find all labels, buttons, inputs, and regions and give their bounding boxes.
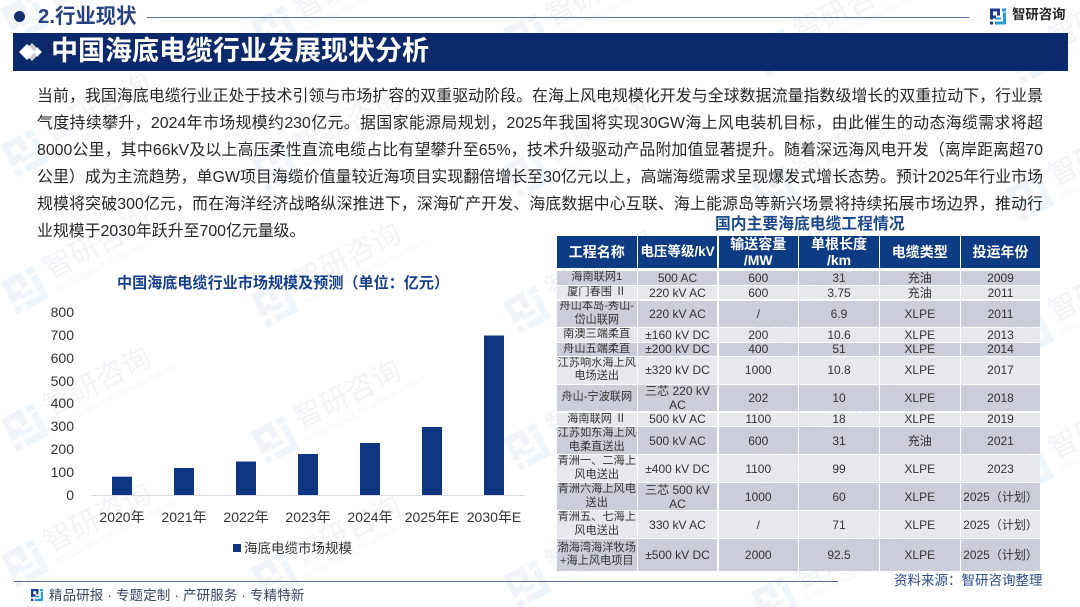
row: / <box>757 518 760 532</box>
row: 330 kV AC <box>649 518 706 532</box>
text: INTELLIGENCE RESEARCH GROUP <box>53 361 178 431</box>
y axis labels: 0 <box>66 487 74 503</box>
text: INTELLIGENCE RESEARCH GROUP <box>303 237 428 307</box>
row <box>557 483 1040 510</box>
y axis labels: 800 <box>51 304 74 320</box>
intro paragraph <box>37 87 1043 240</box>
text: INTELLIGENCE RESEARCH GROUP <box>803 124 928 194</box>
row <box>557 286 1040 299</box>
row: XLPE <box>904 548 935 562</box>
x axis labels: 2023年 <box>285 509 331 525</box>
text: 智研咨询 <box>38 341 157 423</box>
icon: brand logo <box>990 8 1006 24</box>
row: 500 AC <box>658 271 697 285</box>
row: 送出 <box>586 497 608 509</box>
text: 智研咨询 <box>788 377 907 459</box>
row: 2023 <box>987 462 1014 476</box>
row: 2009 <box>987 271 1014 285</box>
row: 青洲六海上风电 <box>558 483 636 495</box>
row <box>557 271 1040 285</box>
row: 600 <box>748 271 768 285</box>
row <box>557 539 1040 571</box>
row: XLPE <box>904 490 935 504</box>
row <box>557 427 1040 454</box>
row: XLPE <box>904 363 935 377</box>
footer slogan: 精品研报 · 专题定制 · 产研服务 · 专精特新 <box>49 588 304 603</box>
row: 92.5 <box>827 548 851 562</box>
y axis labels: 200 <box>51 441 74 457</box>
text: 智研咨询 <box>788 514 907 596</box>
row <box>557 455 1040 482</box>
text: 智研咨询 <box>288 490 407 572</box>
header rule <box>147 17 969 18</box>
row: 10.8 <box>827 363 851 377</box>
bars <box>112 336 504 495</box>
icon: footer logo <box>31 589 43 601</box>
title banner <box>13 33 1068 71</box>
row: 71 <box>832 518 846 532</box>
chart title: 中国海底电缆行业市场规模及预测（单位：亿元） <box>117 275 449 292</box>
table header: 投运年份 <box>972 244 1028 260</box>
row: 电柔直送出 <box>569 441 625 453</box>
text: 智研咨询 <box>288 217 407 299</box>
text: INTELLIGENCE RESEARCH GROUP <box>53 87 178 157</box>
row: 岱山联网 <box>574 314 619 326</box>
row: +海上风电项目 <box>560 555 634 567</box>
row: 风电送出 <box>574 469 619 481</box>
text: INTELLIGENCE RESEARCH GROUP <box>555 108 680 178</box>
row: 2000 <box>745 548 772 562</box>
row: ±400 kV DC <box>645 462 710 476</box>
icon: double diamonds <box>19 43 42 61</box>
brand name: 智研咨询 <box>1012 7 1066 22</box>
table header <box>557 236 1040 268</box>
section bullet <box>14 11 25 22</box>
row: 200 <box>748 328 768 342</box>
text: 智研咨询 <box>788 104 907 186</box>
row <box>557 511 1040 538</box>
row: 31 <box>832 271 846 285</box>
intro paragraph: 规模将突破300亿元，而在海洋经济战略纵深推进下，深海矿产开发、海底数据中心互联、海上能源岛等新兴场景将持续拓展市场边界，推动行 <box>37 196 1043 213</box>
row <box>557 328 1040 342</box>
row: 充油 <box>908 271 932 285</box>
legend: 海底电缆市场规模 <box>244 540 352 556</box>
y axis labels: 700 <box>51 327 74 343</box>
y axis labels: 300 <box>51 418 74 434</box>
row: 舟山-宁波联网 <box>561 391 632 403</box>
text: 智研咨询 <box>788 240 907 322</box>
row: 2025（计划） <box>963 548 1038 562</box>
x axis labels <box>99 509 521 525</box>
text: INTELLIGENCE RESEARCH GROUP <box>803 397 928 467</box>
text: 智研咨询 <box>288 354 407 436</box>
table: major submarine cable projects <box>557 236 1040 571</box>
row: 10.6 <box>827 328 851 342</box>
row <box>557 413 1040 426</box>
row: 99 <box>832 462 846 476</box>
main title: 中国海底电缆行业发展现状分析 <box>51 36 429 66</box>
row: 600 <box>748 434 768 448</box>
row: ±500 kV DC <box>645 548 710 562</box>
row: 风电送出 <box>574 525 619 537</box>
row: 江苏响水海上风 <box>558 357 636 369</box>
table title: 国内主要海底电缆工程情况 <box>715 216 905 233</box>
intro paragraph: 当前，我国海底电缆行业正处于技术引领与市场扩容的双重驱动阶段。在海上风电规模化开发与全球数据流量指数级增长的双重拉动下，行业景 <box>37 88 1043 105</box>
row: 渤海湾海洋牧场 <box>558 542 636 554</box>
text: 智研咨询 <box>38 204 157 286</box>
y axis labels: 400 <box>51 395 74 411</box>
text: INTELLIGENCE RESEARCH GROUP <box>555 381 680 451</box>
text: 智研咨询 <box>288 81 407 163</box>
y axis labels: 500 <box>51 373 74 389</box>
intro paragraph: 公里）成为主流趋势，单GW项目海缆价值量较近海项目实现翻倍增长至30亿元以上，高端海缆需求呈现爆发式增长态势。预计2025年行业市场 <box>37 169 1043 186</box>
intro paragraph: 业规模于2030年跃升至700亿元量级。 <box>37 223 305 240</box>
row: 2017 <box>987 363 1014 377</box>
row: 海南联网1 <box>571 271 622 283</box>
table header: /km <box>827 252 851 268</box>
row: 电场送出 <box>574 370 619 382</box>
row <box>557 343 1040 356</box>
text: INTELLIGENCE RESEARCH GROUP <box>53 497 178 567</box>
row: 青洲五、七海上 <box>558 511 636 523</box>
row: ±160 kV DC <box>645 328 710 342</box>
text: 智研咨询 <box>540 498 659 580</box>
text: 智研咨询 <box>38 67 157 149</box>
row: 2018 <box>987 391 1014 405</box>
bar chart <box>50 304 525 556</box>
text: INTELLIGENCE RESEARCH GROUP <box>303 101 428 171</box>
table header: 单根长度 <box>811 236 867 252</box>
x axis labels: 2025年E <box>405 509 459 525</box>
y axis labels <box>51 304 74 503</box>
text: INTELLIGENCE RESEARCH GROUP <box>803 260 928 330</box>
row: / <box>757 307 760 321</box>
row: 厦门春围 Ⅱ <box>567 286 626 298</box>
row: 1000 <box>745 490 772 504</box>
row: 220 kV AC <box>649 307 706 321</box>
text: INTELLIGENCE RESEARCH GROUP <box>555 244 680 314</box>
row: 2011 <box>988 307 1013 321</box>
row: 10 <box>832 391 846 405</box>
row <box>557 301 1040 327</box>
y axis labels: 100 <box>51 464 74 480</box>
row <box>557 385 1040 411</box>
row: 1000 <box>745 363 772 377</box>
x axis labels: 2022年 <box>223 509 269 525</box>
row: XLPE <box>904 518 935 532</box>
text: 智研咨询 <box>38 477 157 559</box>
x axis labels: 2030年E <box>467 509 521 525</box>
row: 2021 <box>987 434 1014 448</box>
row: 1100 <box>745 462 771 476</box>
text: 智研咨询 <box>540 88 659 170</box>
row: 2025（计划） <box>963 490 1038 504</box>
row: 31 <box>832 434 846 448</box>
row <box>557 357 1040 384</box>
row: XLPE <box>904 328 935 342</box>
row: 500 kV AC <box>649 434 706 448</box>
intro paragraph: 8000公里，其中66kV及以上高压柔性直流电缆占比有望攀升至65%，技术升级驱动产品附加值显著提升。随着深远海风电开发（离岸距离超70 <box>37 142 1043 159</box>
row: 充油 <box>908 434 932 448</box>
footer rule <box>14 581 838 582</box>
text: INTELLIGENCE RESEARCH GROUP <box>555 518 680 588</box>
table header: 电缆类型 <box>892 244 948 260</box>
text: INTELLIGENCE RESEARCH GROUP <box>803 534 928 604</box>
text: 智研咨询 <box>540 224 659 306</box>
y axis labels: 600 <box>51 350 74 366</box>
row: 60 <box>832 490 846 504</box>
section heading: 2.行业现状 <box>38 6 137 28</box>
text: INTELLIGENCE RESEARCH GROUP <box>303 374 428 444</box>
text: 智研咨询 <box>540 361 659 443</box>
intro paragraph: 气度持续攀升，2024年市场规模约230亿元。据国家能源局规划，2025年我国将实现30GW海上风电装机目标，由此催生的动态海缆需求将超 <box>37 115 1043 132</box>
row: XLPE <box>904 307 935 321</box>
row: 南澳三端柔直 <box>563 328 630 340</box>
table header: 电压等级/kV <box>640 244 715 259</box>
row: XLPE <box>904 391 935 405</box>
row: 江苏如东海上风 <box>558 427 636 439</box>
row: 6.9 <box>831 307 847 321</box>
row: 青洲一、二海上 <box>558 455 636 467</box>
row: 202 <box>748 391 768 405</box>
table header: /MW <box>744 252 773 268</box>
table header: 工程名称 <box>569 244 625 260</box>
source note: 资料来源：智研咨询整理 <box>894 573 1042 588</box>
row: XLPE <box>904 462 935 476</box>
x axis labels: 2021年 <box>161 509 207 525</box>
row: 2013 <box>987 328 1014 342</box>
x axis labels: 2024年 <box>347 509 393 525</box>
row: 海南联网 Ⅱ <box>567 413 626 425</box>
row: 2025（计划） <box>963 518 1038 532</box>
row: ±320 kV DC <box>645 363 710 377</box>
text: INTELLIGENCE RESEARCH GROUP <box>53 224 178 294</box>
x axis labels: 2020年 <box>99 509 145 525</box>
table header: 输送容量 <box>730 236 786 252</box>
text: INTELLIGENCE RESEARCH GROUP <box>303 510 428 580</box>
